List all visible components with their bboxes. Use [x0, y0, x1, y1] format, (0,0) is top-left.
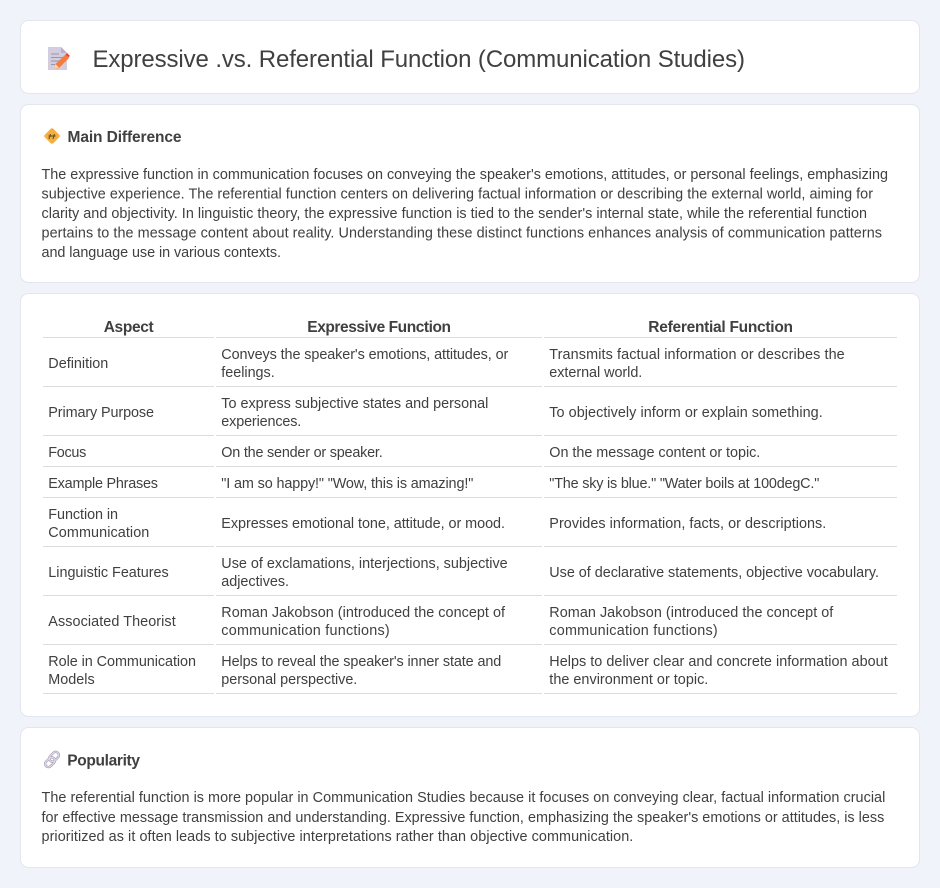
icon: document with pencil [48, 47, 70, 70]
table row: role in communication models: Helps to deliver clear and concrete information about [549, 654, 888, 670]
table row: associated theorist: Associated Theorist [48, 614, 176, 630]
table row: function in communication [43, 507, 897, 547]
text block: main difference paragraph [42, 167, 888, 261]
text block: popularity paragraph: for effective message transmission and understanding. Expressive function, emphasizing the speaker's emotions or attitudes, is less [42, 810, 884, 826]
panel: comparison table [20, 294, 920, 716]
table row: linguistic features: Use of exclamations, interjections, subjective [221, 556, 508, 572]
table row: focus [43, 445, 897, 467]
text block: main difference paragraph: subjective experience. The referential function centers on delivering factual information or describing the external world, aiming for [42, 186, 873, 202]
table header: Expressive Function [307, 319, 451, 336]
table row: associated theorist: communication functions) [549, 623, 718, 639]
icon: chain link [44, 751, 60, 768]
panel: title card [20, 20, 920, 94]
table row: primary purpose: Primary Purpose [48, 405, 154, 421]
table row: example phrases [43, 476, 897, 498]
table row: definition: Conveys the speaker's emotions, attitudes, or [221, 347, 509, 363]
table row: linguistic features: Linguistic Features [48, 565, 169, 581]
table row: linguistic features: adjectives. [221, 574, 289, 590]
table header: Aspect [104, 319, 154, 336]
table row: primary purpose: experiences. [221, 414, 301, 430]
text block: main difference paragraph: pertains to the message content about reality. Understanding these distinct functions enhances analysis of communication patterns [42, 226, 882, 242]
table row: associated theorist: Roman Jakobson (introduced the concept of [221, 605, 506, 621]
table row: associated theorist: communication functions) [221, 623, 390, 639]
table header: Referential Function [648, 319, 793, 336]
table row: linguistic features: Use of declarative statements, objective vocabulary. [549, 565, 879, 581]
table row: linguistic features [43, 556, 897, 596]
table row: example phrases: "The sky is blue." "Water boils at 100degC." [549, 476, 819, 492]
table row: role in communication models: personal perspective. [221, 672, 357, 688]
table row: function in communication: Communication [48, 525, 149, 541]
table row: definition: Transmits factual information or describes the [549, 347, 845, 363]
panel: main difference [20, 104, 920, 282]
table row: role in communication models: Role in Communication [48, 654, 196, 670]
panel: popularity [20, 728, 920, 868]
heading: popularity: Popularity [67, 752, 140, 770]
text block: main difference paragraph: clarity and objectivity. In linguistic theory, the expressive function is tied to the sender's internal state, while the referential function [42, 206, 867, 222]
table row: role in communication models: the environment or topic. [549, 672, 708, 688]
table row: function in communication: Provides information, facts, or descriptions. [549, 516, 826, 532]
text block: popularity paragraph: The referential function is more popular in Communication Studies because it focuses on conveying clear, factual information crucial [42, 790, 885, 806]
table row: primary purpose: To express subjective states and personal [221, 396, 488, 412]
table row: focus: On the sender or speaker. [221, 445, 383, 461]
table row: role in communication models: Helps to reveal the speaker's inner state and [221, 654, 501, 670]
table row: example phrases: "I am so happy!" "Wow, this is amazing!" [221, 476, 473, 492]
text block: main difference paragraph: The expressive function in communication focuses on conveying the speaker's emotions, attitudes, or personal feelings, emphasizing [42, 167, 888, 183]
table row: role in communication models: Models [48, 672, 95, 688]
heading: main difference: Main Difference [68, 129, 182, 146]
table row: focus: On the message content or topic. [549, 445, 760, 461]
table row: definition [43, 347, 897, 387]
table row: function in communication: Expresses emotional tone, attitude, or mood. [221, 516, 505, 532]
text block: main difference paragraph: and language use in various contexts. [42, 245, 281, 261]
table header [43, 319, 897, 338]
table row: function in communication: Function in [48, 507, 118, 523]
table row: primary purpose [43, 396, 897, 436]
text block: popularity paragraph [42, 790, 885, 845]
table row: definition: external world. [549, 365, 642, 381]
table row: definition: Definition [48, 356, 108, 372]
table row: focus: Focus [48, 445, 86, 461]
table row: definition: feelings. [221, 365, 275, 381]
table row: associated theorist [43, 605, 897, 645]
table row: associated theorist: Roman Jakobson (introduced the concept of [549, 605, 834, 621]
table row: primary purpose: To objectively inform or explain something. [549, 405, 823, 421]
table row: role in communication models [43, 654, 897, 694]
title: Expressive .vs. Referential Function (Communication Studies) [92, 46, 745, 73]
table row: example phrases: Example Phrases [48, 476, 158, 492]
icon: diamond warning sign [44, 128, 60, 144]
text block: popularity paragraph: prioritized as it often leads to subjective interpretations rather than objective communication. [42, 829, 633, 845]
